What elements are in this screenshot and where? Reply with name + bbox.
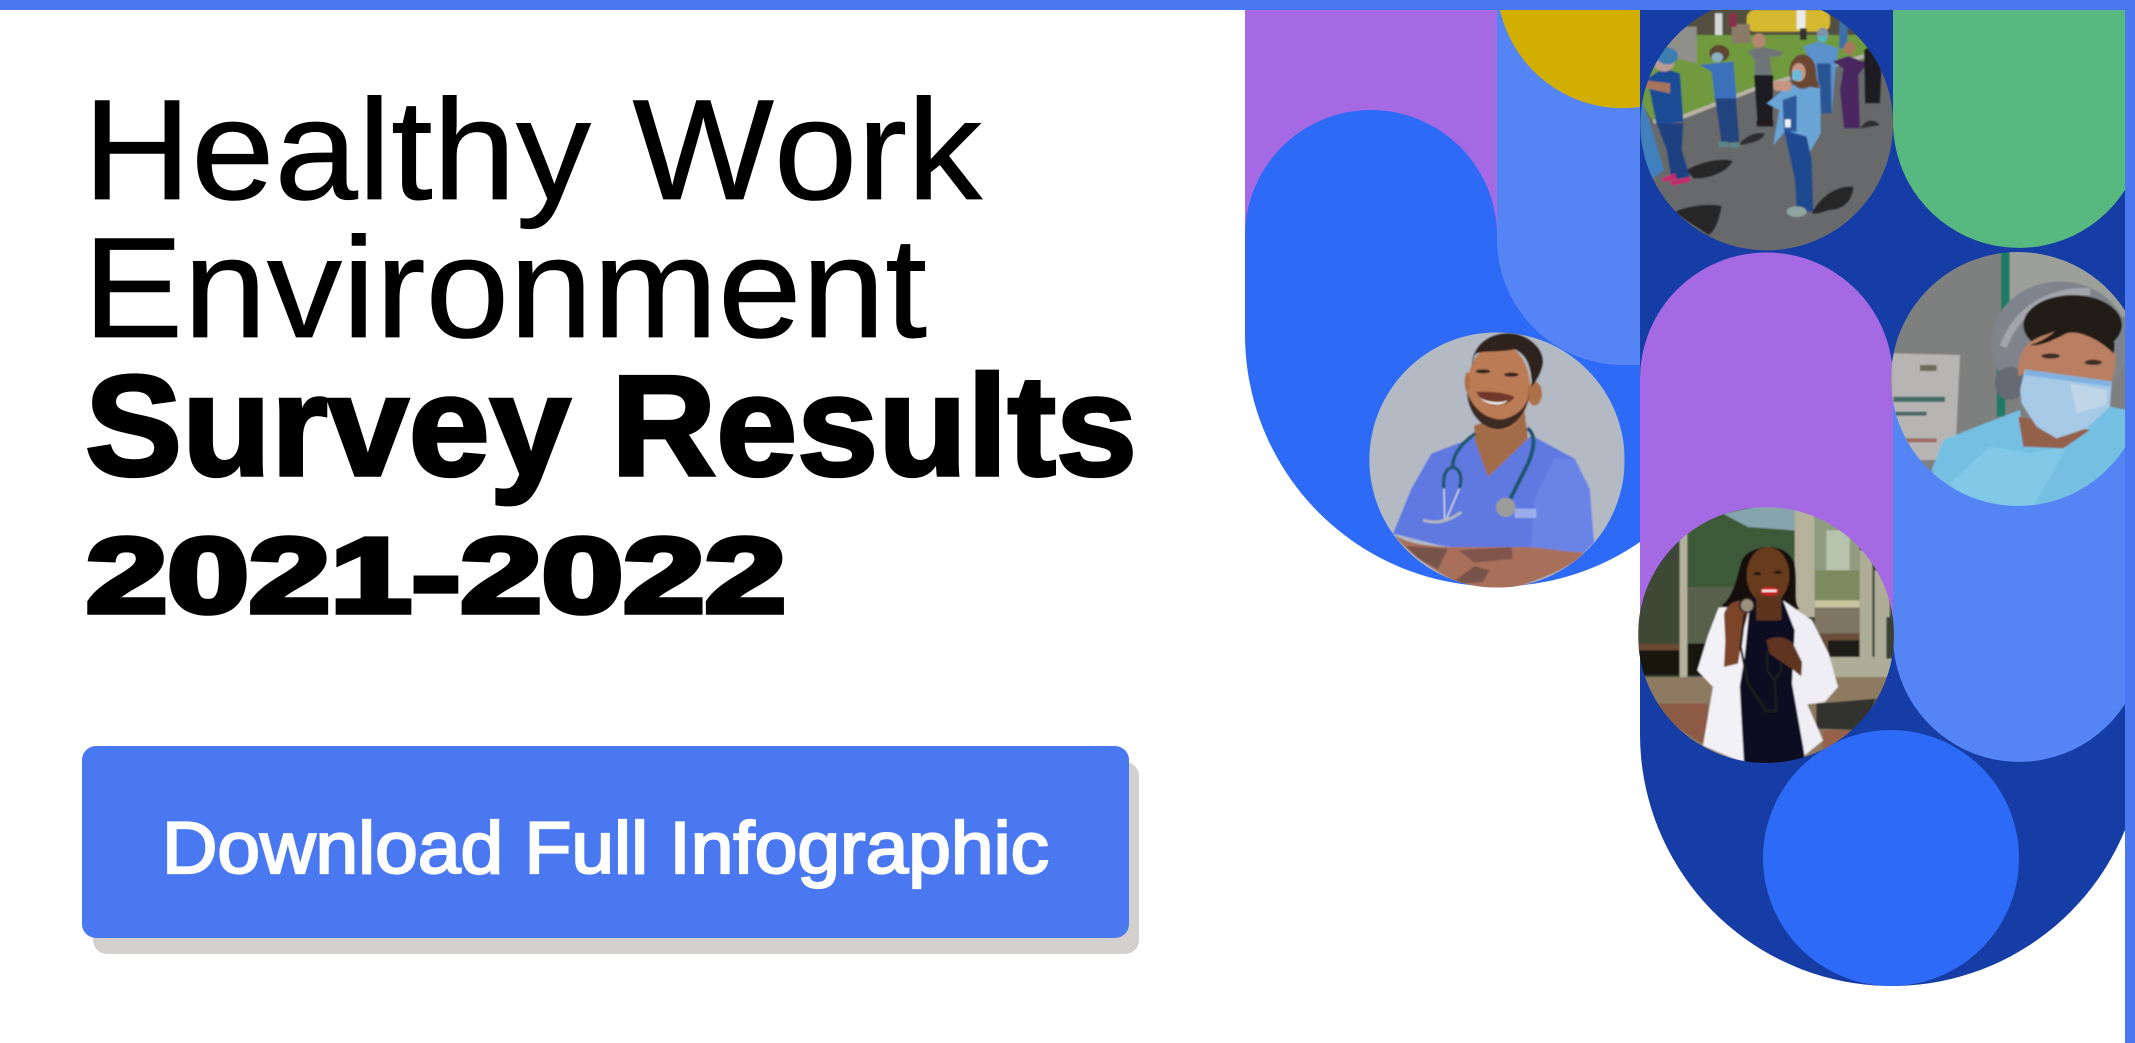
title line: Environment: Environment (83, 209, 927, 368)
photo: smiling male nurse with stethoscope (1368, 332, 1625, 589)
shape: green capsule (1893, 10, 2125, 248)
photo: doctor in white coat holding stethoscope (1638, 507, 1895, 764)
shape: purple capsule (1640, 253, 1893, 640)
top border bar (0, 0, 2135, 10)
decorative shape collage (1245, 10, 2125, 986)
shape: bright blue capsule with large arc (1245, 110, 1640, 587)
shape: dark blue column (1640, 10, 2125, 986)
shape: purple left column (1245, 10, 1497, 250)
button: download full infographic (82, 746, 1139, 954)
button face (82, 746, 1129, 938)
title line: 2021-2022: 2021-2022 (86, 517, 786, 635)
photo: woman in mask and hairnet (1890, 250, 2135, 507)
title line: Survey Results: Survey Results (85, 347, 1137, 506)
title line: Healthy Work: Healthy Work (83, 71, 983, 230)
shape: bright blue circle (1763, 730, 2019, 986)
photo: staff group on pavement (1637, 0, 1900, 253)
shape: light blue capsule (1497, 10, 1640, 365)
shape: light blue lower capsule (1893, 379, 2125, 762)
button label: Download Full Infographic (162, 808, 1049, 889)
button shadow (93, 762, 1139, 954)
right border bar (2125, 0, 2135, 1043)
shape: yellow arc (1500, 10, 1640, 108)
title (83, 71, 1137, 635)
